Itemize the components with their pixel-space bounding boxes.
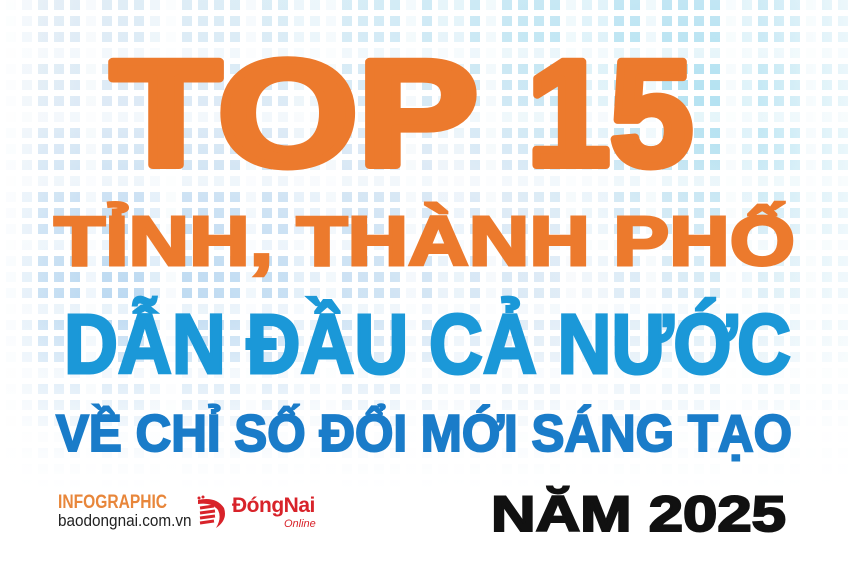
title: TOP 15: TOP [111, 29, 478, 197]
title: TOP 15 [111, 29, 693, 197]
subtitle: TỈNH, THÀNH PHỐ: TỈNH, THÀNH PHỐ [54, 201, 795, 280]
logo: infographic label: INFOGRAPHIC [58, 492, 167, 513]
icon: logo mark [198, 496, 225, 528]
logo: infographic label [58, 492, 192, 530]
logo: infographic label: baodongnai.com.vn [58, 511, 192, 530]
logo: Dong Nai Online: Online [284, 518, 316, 530]
logo: Dong Nai Online: ĐóngNai [232, 494, 315, 517]
year: NĂM 2025: NĂM 2025 [491, 486, 786, 542]
title: TOP 15: 15 [527, 29, 693, 197]
logo: Dong Nai Online [198, 494, 316, 530]
subtitle: VỀ CHỈ SỐ ĐỔI MỚI SÁNG TẠO: VỀ CHỈ SỐ ĐỔI MỚI SÁNG TẠO [56, 404, 792, 463]
